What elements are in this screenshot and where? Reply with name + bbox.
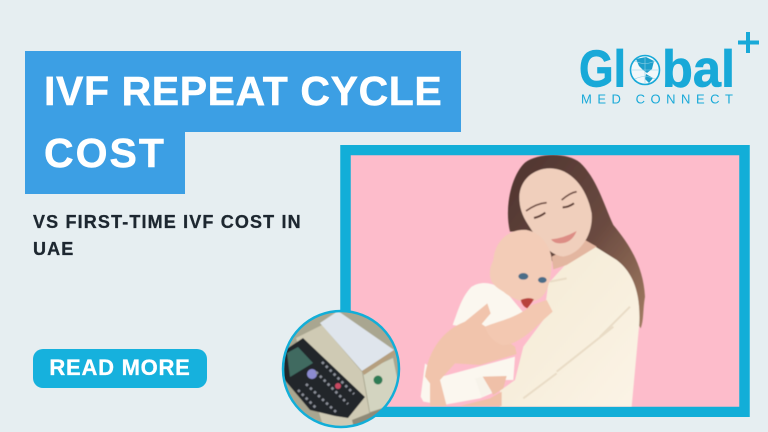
logo plus sign xyxy=(738,32,759,53)
icon: globe xyxy=(630,56,660,84)
title band: first line xyxy=(25,51,461,132)
read more button xyxy=(33,349,207,388)
calculator xyxy=(283,338,365,418)
logo wordmark: bal xyxy=(662,40,735,98)
banknotes background xyxy=(284,312,398,422)
baby's foot xyxy=(483,376,507,395)
subtitle xyxy=(33,212,302,259)
woman's hair xyxy=(508,155,645,328)
title band: second line xyxy=(25,132,185,194)
logo wordmark xyxy=(579,40,735,98)
title line 2: COST xyxy=(44,130,166,176)
mother and baby illustration xyxy=(421,155,645,407)
title banner xyxy=(25,51,461,194)
logo tagline: MED CONNECT xyxy=(581,92,733,106)
woman's face xyxy=(519,168,592,257)
baby's lower body xyxy=(421,357,515,405)
subtitle: VS FIRST-TIME IVF COST IN xyxy=(33,212,302,232)
baby's onesie top xyxy=(453,283,523,330)
title line 1: IVF REPEAT CYCLE xyxy=(44,68,442,114)
subtitle: UAE xyxy=(33,239,74,259)
read more button: READ MORE xyxy=(49,355,191,380)
baby's arm xyxy=(485,300,553,345)
woman's other arm xyxy=(460,392,502,406)
woman's neck xyxy=(552,240,597,269)
notepad xyxy=(320,311,394,371)
baby's head xyxy=(490,230,552,302)
logo wordmark: Gl xyxy=(579,40,626,98)
logo xyxy=(579,32,759,106)
photo panel: mother and baby xyxy=(340,145,750,417)
woman's shirt xyxy=(500,243,639,407)
woman's arm and hand xyxy=(425,303,517,406)
pink photo background xyxy=(346,150,744,412)
calculator and money photo circle xyxy=(282,310,400,428)
circle outline xyxy=(283,311,399,427)
